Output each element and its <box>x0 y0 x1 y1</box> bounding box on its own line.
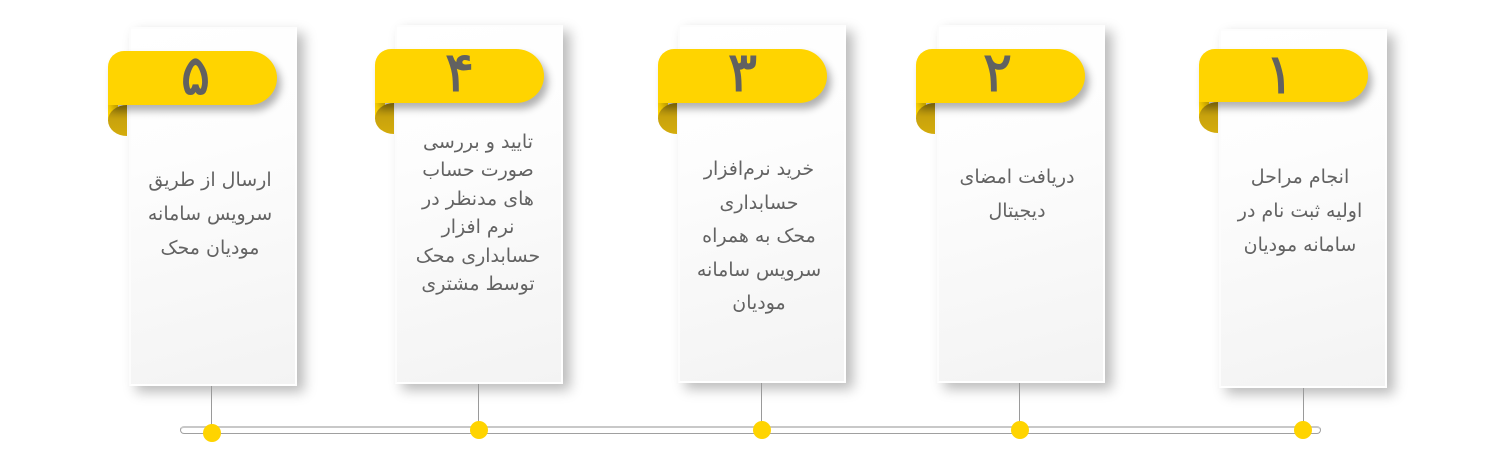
step 3 text: سرویس سامانه <box>697 259 821 281</box>
step 1 text: سامانه مودیان <box>1244 234 1356 256</box>
step 3 connector <box>761 383 762 423</box>
step 4 <box>374 24 577 439</box>
step 4 connector <box>478 384 479 424</box>
step 3 number: ۳ <box>728 40 757 104</box>
step 2 number: ۲ <box>983 40 1012 104</box>
step 2 text: دریافت امضای <box>959 166 1075 188</box>
step 2 text: دیجیتال <box>988 200 1046 222</box>
step 5 card <box>129 27 297 386</box>
step 4 text: نرم افزار <box>442 216 514 238</box>
step 5 text: مودیان محک <box>160 237 259 259</box>
step 3 ribbon <box>658 49 827 103</box>
step 1 text: انجام مراحل <box>1251 166 1349 188</box>
timeline track <box>180 426 1321 434</box>
step 4 text <box>416 131 540 295</box>
step 3 text <box>697 158 821 314</box>
step 4 timeline dot <box>470 421 488 439</box>
step 5 connector <box>211 386 212 426</box>
step 5 <box>108 26 311 442</box>
step 1 connector <box>1303 388 1304 424</box>
step 3 text: مودیان <box>732 292 786 314</box>
step 2 timeline dot <box>1011 421 1029 439</box>
step 2 <box>916 24 1119 439</box>
step 4 ribbon fold <box>375 103 394 134</box>
step 5 text <box>148 169 272 259</box>
step 5 ribbon fold <box>108 105 127 136</box>
step 1 text: اولیه ثبت نام در <box>1238 200 1362 222</box>
step 4 card <box>395 25 563 384</box>
step 3 text: خرید نرم‌افزار <box>704 158 814 180</box>
step 5 text: سرویس سامانه <box>148 203 272 225</box>
step 5 timeline dot <box>203 424 221 442</box>
step 4 number: ۴ <box>445 40 474 104</box>
step 1 card <box>1219 29 1387 388</box>
step 5 text: ارسال از طریق <box>148 169 272 191</box>
step 4 text: صورت حساب <box>422 159 534 181</box>
step 5 number: ۵ <box>181 43 210 107</box>
step 4 text: حسابداری محک <box>416 245 540 267</box>
step 2 text <box>959 166 1075 222</box>
step 3 text: حسابداری <box>719 192 799 214</box>
step 1 timeline dot <box>1294 421 1312 439</box>
step 2 ribbon fold <box>916 103 935 134</box>
step 3 card <box>678 25 846 383</box>
step 2 card <box>937 25 1105 383</box>
step 3 ribbon fold <box>658 103 677 134</box>
step 1 text <box>1236 166 1362 256</box>
step 4 text: توسط مشتری <box>421 273 535 295</box>
step 3 timeline dot <box>753 421 771 439</box>
step 3 text: محک به همراه <box>702 225 816 247</box>
step 3 <box>658 24 860 439</box>
step 1 <box>1198 28 1401 439</box>
step 2 ribbon <box>916 49 1085 103</box>
step 4 text: های مدنظر در <box>422 188 534 210</box>
step 5 ribbon <box>108 51 277 105</box>
step 1 ribbon fold <box>1199 102 1218 133</box>
step 1 ribbon <box>1199 49 1368 102</box>
step 2 connector <box>1019 383 1020 423</box>
step 4 text: تایید و بررسی <box>423 131 533 153</box>
step 1 number: ۱ <box>1265 42 1294 106</box>
step 4 ribbon <box>375 49 544 103</box>
